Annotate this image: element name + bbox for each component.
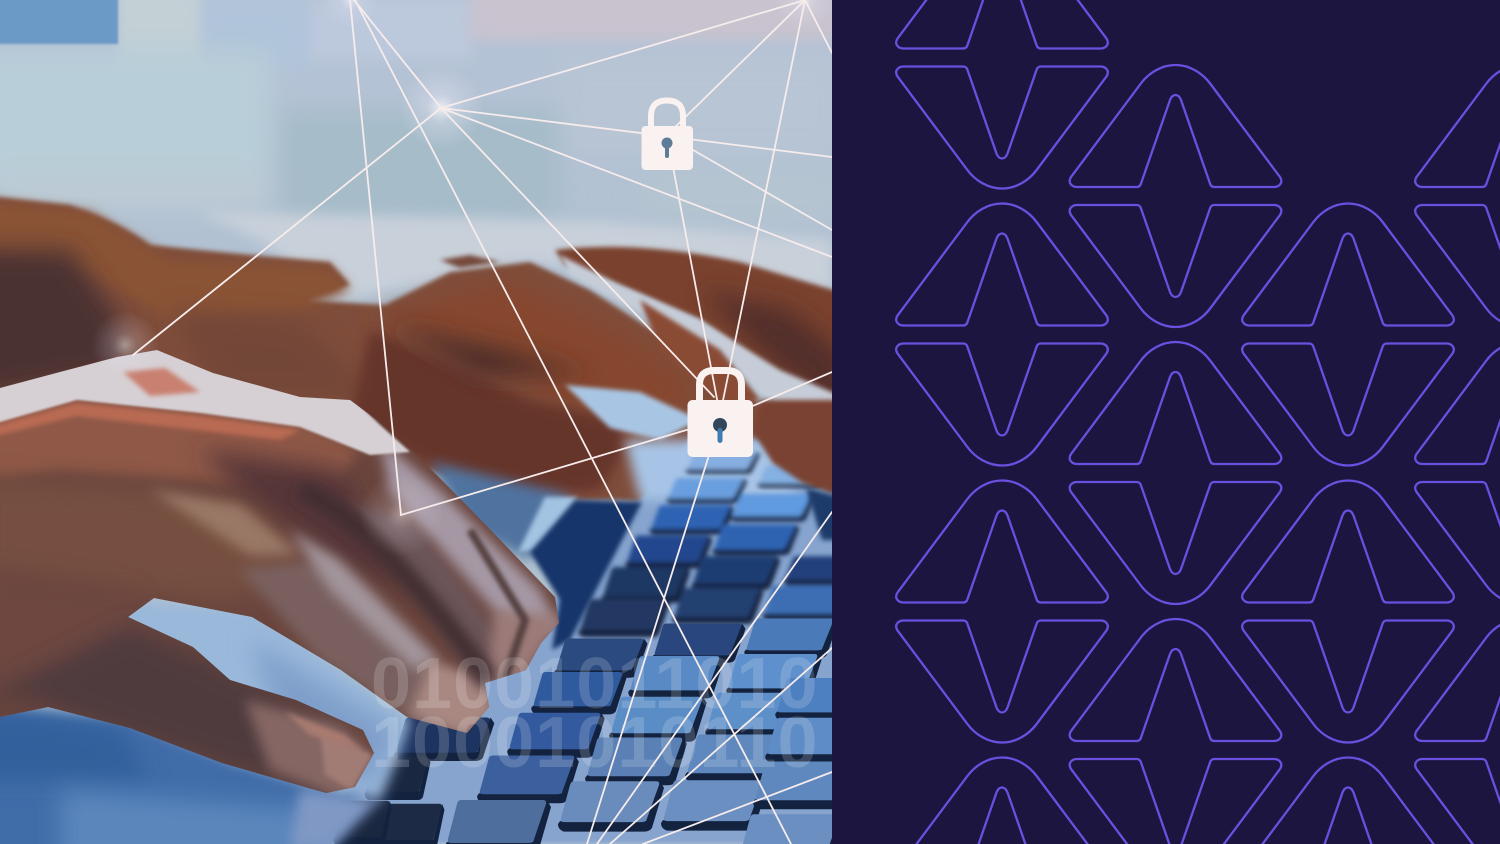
binary digits overlay — [371, 644, 818, 783]
back hand — [0, 195, 850, 520]
desk below the hand — [0, 600, 410, 844]
geometric outline pattern — [896, 0, 1500, 844]
blurred office background — [0, 0, 850, 844]
icon: padlock lower — [688, 370, 753, 457]
network node glows — [91, 0, 835, 557]
front hand — [0, 350, 559, 793]
icon: padlock upper — [642, 100, 693, 170]
panel: photo of hands typing on keyboard — [0, 0, 832, 844]
keyboard — [300, 400, 871, 844]
network lines — [133, 0, 832, 844]
panel: dark purple pattern background — [832, 0, 1500, 844]
binary digits overlay: 10001010110 — [371, 703, 818, 783]
binary digits overlay: 01001011010 — [371, 644, 818, 724]
highlighted back of hand — [0, 348, 410, 455]
